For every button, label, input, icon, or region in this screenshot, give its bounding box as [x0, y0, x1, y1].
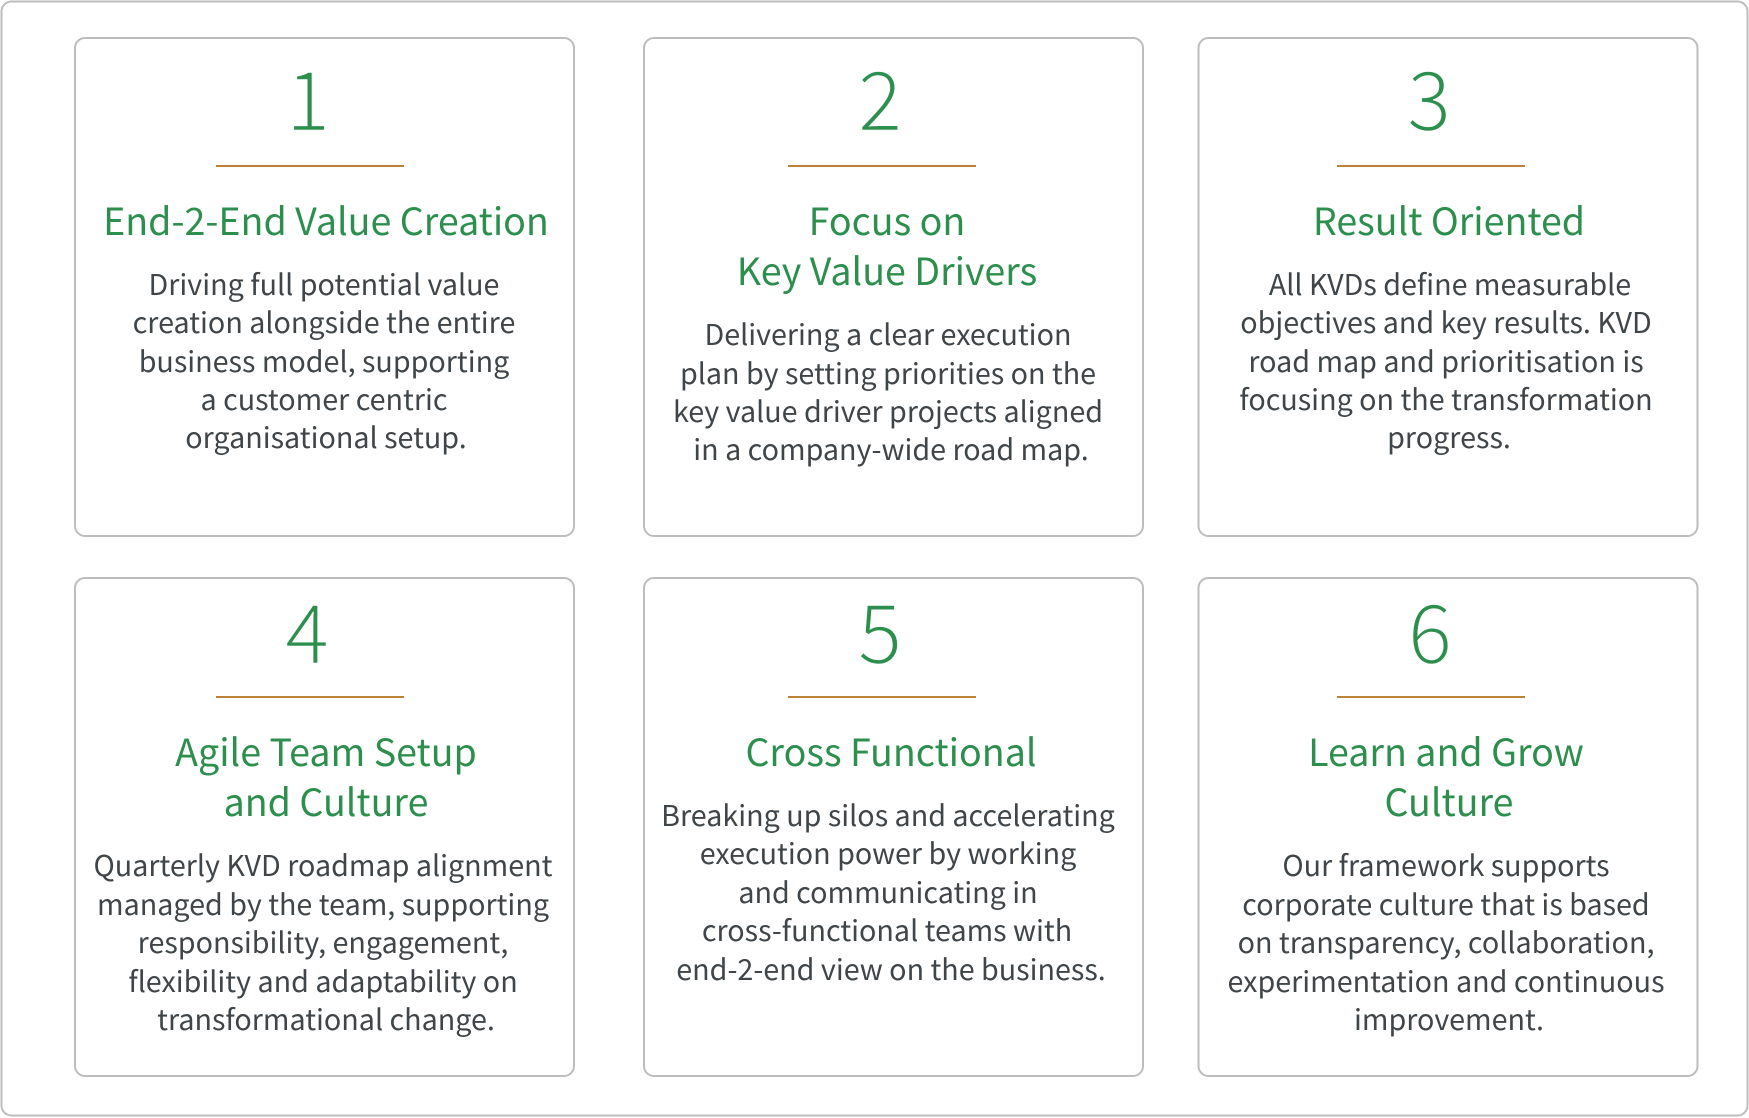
panel: card 5 — [644, 570, 1143, 1076]
heading 6: Culture — [1384, 772, 1514, 827]
body text 2: key value driver projects aligned — [673, 390, 1103, 431]
body text 5: end-2-end view on the business. — [676, 948, 1106, 989]
divider 2 — [788, 165, 976, 167]
body text 4: responsibility, engagement, — [138, 921, 508, 962]
body text 5: Breaking up silos and accelerating — [661, 794, 1115, 835]
body text 3: progress. — [1387, 416, 1511, 457]
number 3: 3 — [1407, 37, 1451, 154]
heading 2 — [737, 191, 1037, 296]
heading 4: Agile Team Setup — [175, 722, 477, 777]
body text 5: execution power by working — [700, 832, 1076, 873]
divider 5 — [788, 696, 976, 698]
panel: card 3 — [1198, 37, 1698, 536]
heading 6 — [1308, 722, 1584, 827]
body text 4: transformational change. — [157, 998, 495, 1039]
body text 6: Our framework supports — [1282, 844, 1610, 885]
body text 3: objectives and key results. KVD — [1240, 301, 1652, 342]
panel: card 6 — [1198, 570, 1698, 1076]
panel: card 4 — [75, 570, 574, 1076]
heading 6: Learn and Grow — [1308, 722, 1584, 777]
body text 6 — [1228, 844, 1664, 1039]
body text 6: improvement. — [1354, 998, 1544, 1039]
divider 4 — [216, 696, 404, 698]
heading 5: Cross Functional — [745, 722, 1037, 777]
heading 3: Result Oriented — [1313, 191, 1585, 246]
body text 5: cross-functional teams with — [702, 909, 1072, 950]
number 5: 5 — [858, 570, 902, 687]
panel: card 2 — [644, 37, 1143, 536]
body text 4 — [94, 844, 553, 1039]
body text 3: focusing on the transformation — [1239, 378, 1653, 419]
body text 2: plan by setting priorities on the — [680, 352, 1096, 393]
body text 1: Driving full potential value — [149, 263, 499, 304]
body text 2 — [673, 313, 1103, 469]
panel: card 1 — [75, 37, 574, 536]
body text 6: experimentation and continuous — [1228, 960, 1664, 1001]
body text 1: organisational setup. — [185, 416, 467, 457]
number 2: 2 — [858, 37, 902, 154]
body text 1 — [133, 263, 515, 457]
body text 6: on transparency, collaboration, — [1238, 921, 1654, 962]
body text 4: Quarterly KVD roadmap alignment — [94, 844, 553, 885]
body text 3: All KVDs define measurable — [1269, 263, 1631, 304]
number 4: 4 — [285, 570, 329, 687]
body text 4: flexibility and adaptability on — [128, 960, 518, 1001]
divider 3 — [1337, 165, 1525, 167]
number 1: 1 — [286, 37, 330, 154]
heading 4 — [175, 722, 477, 827]
body text 3 — [1239, 263, 1653, 457]
body text 1: creation alongside the entire — [133, 301, 515, 342]
body text 2: Delivering a clear execution — [705, 313, 1071, 354]
body text 1: a customer centric — [200, 378, 448, 419]
body text 5: and communicating in — [738, 871, 1038, 912]
number 6: 6 — [1408, 570, 1452, 687]
body text 5 — [661, 794, 1115, 989]
body text 2: in a company-wide road map. — [693, 428, 1089, 469]
body text 1: business model, supporting — [139, 340, 509, 381]
body text 6: corporate culture that is based — [1242, 883, 1650, 924]
body text 3: road map and prioritisation is — [1248, 340, 1644, 381]
heading 1: End-2-End Value Creation — [103, 191, 549, 246]
divider 1 — [216, 165, 404, 167]
body text 4: managed by the team, supporting — [97, 883, 549, 924]
heading 2: Focus on — [809, 191, 965, 246]
heading 4: and Culture — [224, 772, 428, 827]
heading 2: Key Value Drivers — [737, 241, 1037, 296]
divider 6 — [1337, 696, 1525, 698]
